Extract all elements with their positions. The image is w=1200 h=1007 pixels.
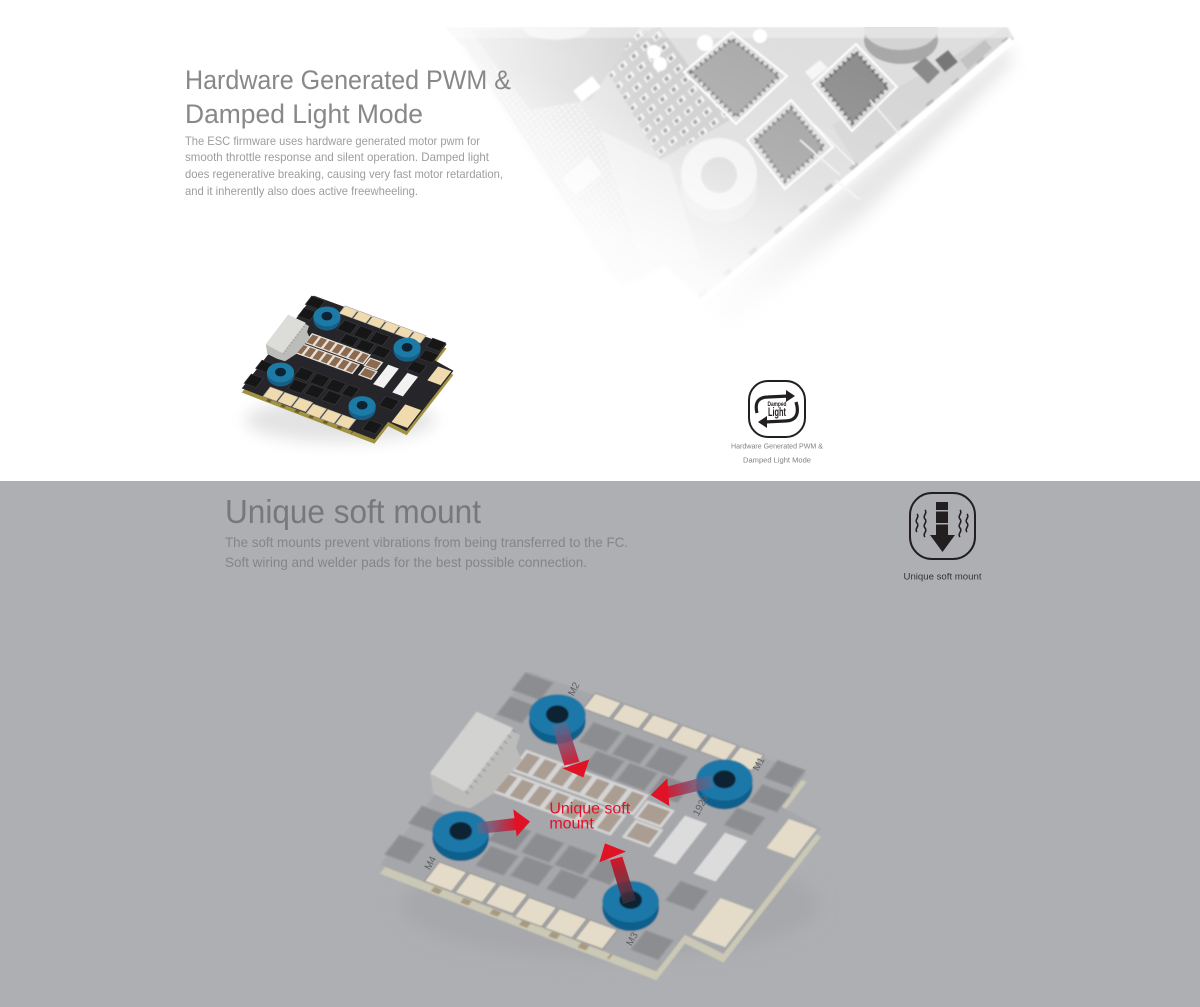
callout: unique soft mount: mount — [549, 815, 594, 832]
silkscreen labels: M3 — [625, 930, 641, 948]
text block: ESC firmware description: and it inherently also does active freewheeling. — [185, 184, 418, 198]
panel: white upper section — [0, 0, 1200, 481]
PCB close-up background image — [463, 27, 1014, 276]
heading: unique soft mount: Unique soft mount — [225, 493, 481, 530]
small ESC board photo — [239, 294, 469, 451]
heading: hardware generated PWM: Hardware Generated PWM & — [185, 65, 511, 95]
silkscreen labels: M2 — [566, 680, 583, 698]
arrow: bottom ring — [599, 843, 636, 904]
arrow: top ring — [552, 722, 589, 777]
icon caption: hardware generated PWM: Hardware Generated PWM & — [731, 444, 823, 450]
text block: ESC firmware description: does regenerative breaking, causing very fast motor retardation, — [185, 167, 503, 181]
silkscreen labels: M1 — [751, 755, 768, 773]
icon: damped light: Damped — [768, 401, 787, 408]
silkscreen labels: 1929 — [691, 793, 712, 818]
heading: hardware generated PWM: Damped Light Mode — [185, 99, 423, 129]
text block: ESC firmware description: smooth throttle response and silent operation. Damped light — [185, 150, 490, 164]
silkscreen labels — [423, 680, 768, 948]
arrow: right ring — [651, 775, 713, 806]
silkscreen labels: M4 — [423, 854, 439, 872]
icon: soft mount arrow — [910, 493, 975, 559]
text block: ESC firmware description: The ESC firmware uses hardware generated motor pwm for — [185, 134, 480, 148]
text block: ESC firmware description — [185, 134, 503, 198]
icon caption: hardware generated PWM: Damped Light Mode — [743, 458, 811, 464]
icon: damped light — [749, 381, 805, 437]
heading: hardware generated PWM — [185, 65, 511, 129]
icon caption: hardware generated PWM — [731, 444, 823, 464]
text block: soft mount description: Soft wiring and welder pads for the best possible connection. — [225, 554, 587, 570]
icon caption: unique soft mount: Unique soft mount — [904, 572, 982, 582]
callout: unique soft mount: Unique soft — [549, 800, 631, 817]
arrow: left ring — [477, 809, 530, 837]
text block: soft mount description — [225, 534, 628, 570]
icon: damped light: Light — [768, 405, 786, 419]
callout: unique soft mount — [549, 800, 631, 832]
text block: soft mount description: The soft mounts prevent vibrations from being transferred to the FC. — [225, 534, 628, 550]
panel: grey lower section — [0, 481, 1200, 1007]
large ESC board with soft mounts — [374, 669, 852, 995]
